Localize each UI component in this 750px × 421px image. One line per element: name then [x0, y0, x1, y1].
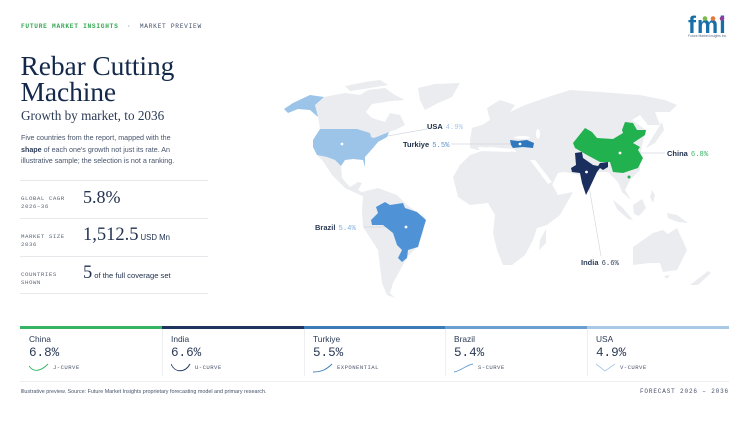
- card: Turkiye: EXPONENTIAL: [337, 364, 379, 370]
- stat: countries shown: [21, 263, 171, 286]
- title: [20, 50, 174, 106]
- country: India: [571, 152, 608, 195]
- card: Turkiye: Turkiye: [313, 334, 340, 344]
- header eyebrow: FUTURE MARKET INSIGHTS · MARKET PREVIEW: [21, 23, 202, 30]
- stat: market size: MARKET SIZE: [21, 233, 65, 240]
- card: Turkiye: 5.5%: [313, 346, 343, 360]
- stats panel: [20, 180, 208, 294]
- card: USA: USA: [596, 334, 613, 344]
- card: China: 6.8%: [29, 346, 59, 360]
- card: USA: V-CURVE: [620, 364, 647, 370]
- intro text: [21, 134, 174, 165]
- stat: global CAGR: [21, 187, 120, 210]
- intro text: illustrative sample; the selection is not a ranking.: [21, 157, 174, 165]
- stat: countries shown: 5 of the full coverage set: [83, 263, 171, 283]
- inland seas: [478, 129, 552, 184]
- stat: market size: 1,512.5 USD Mn: [83, 225, 170, 245]
- label: Turkiye: Turkiye 5.5%: [403, 140, 449, 150]
- card: China: China: [29, 334, 51, 344]
- label: China: China 6.8%: [667, 149, 708, 159]
- card: Brazil: S-CURVE: [478, 364, 505, 370]
- card: China: [20, 326, 162, 371]
- stat: market size: 2036: [21, 241, 37, 248]
- stat: global CAGR: 5.8%: [83, 187, 120, 207]
- stat: global CAGR: 2026–36: [21, 203, 49, 210]
- label: USA: USA 4.9%: [427, 122, 463, 132]
- label: Brazil: Brazil 5.4%: [315, 223, 356, 233]
- logo: FMI: Future Market Insights Inc.: [688, 34, 727, 38]
- stat: countries shown: COUNTRIES: [21, 271, 57, 278]
- leader lines: [342, 129, 665, 256]
- country: China: [573, 122, 646, 178]
- intro text: shape of each one's growth not just its rate. An: [21, 146, 170, 154]
- forecast label: FORECAST 2026 – 2036: [640, 388, 729, 395]
- card: India: [162, 326, 304, 376]
- title: Rebar Cutting: [20, 50, 174, 81]
- label: India: India 6.6%: [581, 258, 619, 268]
- title: Machine: [20, 76, 116, 106]
- card: Brazil: 5.4%: [454, 346, 484, 360]
- intro text: Five countries from the report, mapped with the: [21, 134, 171, 142]
- card: India: India: [171, 334, 189, 344]
- stat: countries shown: SHOWN: [21, 279, 41, 286]
- card: China: J-CURVE: [53, 364, 80, 370]
- card: USA: 4.9%: [596, 346, 626, 360]
- country: Brazil: [371, 202, 426, 262]
- stat: global CAGR: GLOBAL CAGR: [21, 195, 65, 202]
- source note: Illustrative preview. Source: Future Market Insights proprietary forecasting model and primary research.: [20, 389, 266, 395]
- subtitle: Growth by market, to 2036: [21, 108, 164, 123]
- logo: FMI: fmi: [688, 12, 727, 39]
- country: USA: [284, 95, 389, 167]
- card: USA: [587, 326, 729, 376]
- card: India: 6.6%: [171, 346, 201, 360]
- grey landmasses: [315, 80, 711, 298]
- country: Turkiye: [510, 140, 534, 148]
- stat: market size: [21, 225, 170, 248]
- card: Brazil: Brazil: [454, 334, 475, 344]
- card: India: U-CURVE: [195, 364, 222, 370]
- card: Brazil: [445, 326, 587, 376]
- card: Turkiye: [304, 326, 445, 376]
